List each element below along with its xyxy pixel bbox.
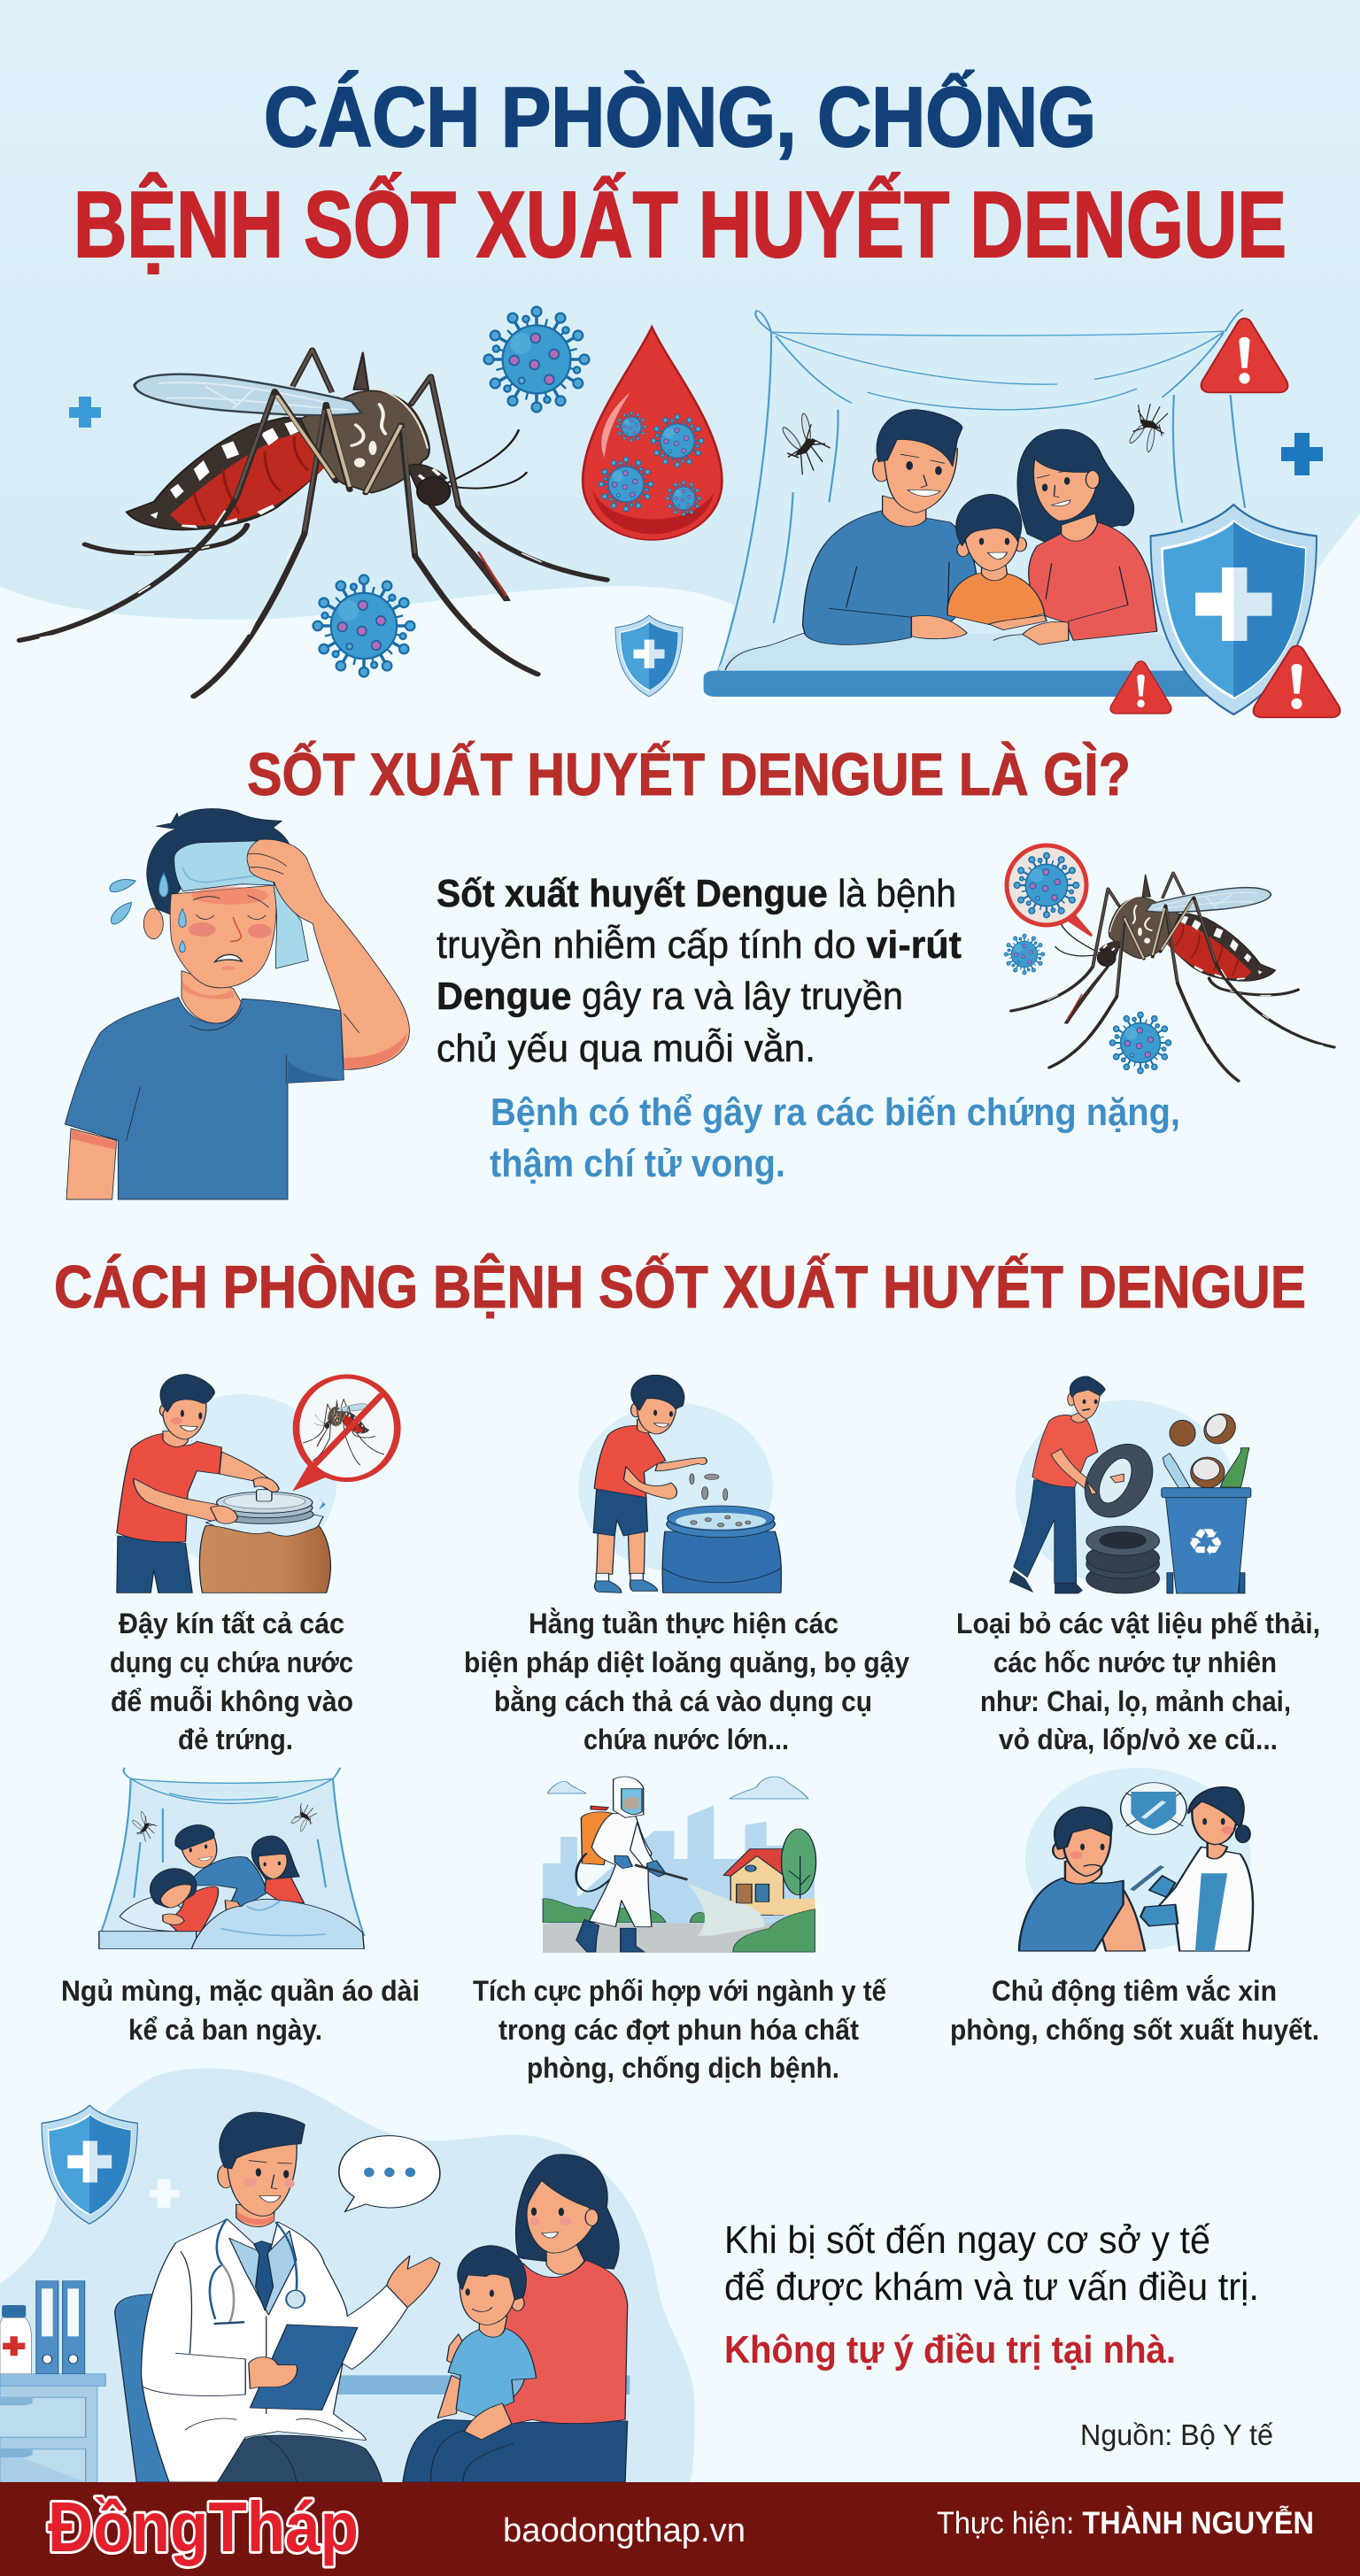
- caption: cover containers: đẻ trứng.: [178, 1724, 293, 1755]
- illustration: mosquito: [19, 350, 607, 697]
- bench: [324, 2375, 630, 2395]
- caption: remove waste: [956, 1608, 1320, 1755]
- icon: no mosquito sign: [294, 1377, 398, 1490]
- text: seek medical care: Không tự ý điều trị tại nhà.: [724, 2328, 1176, 2372]
- text: dengue warning: [490, 1091, 1180, 1185]
- child: [947, 494, 1047, 630]
- blanket: [191, 1899, 364, 1949]
- mother: [167, 1886, 218, 1932]
- illustration: sick man with towel: [65, 809, 409, 1199]
- caption: cooperate spraying: trong các đợt phun hóa chất: [498, 2014, 859, 2046]
- caption: remove waste: Loại bỏ các vật liệu phế thải,: [956, 1608, 1320, 1639]
- bed frame: [704, 671, 1250, 697]
- binders: [36, 2281, 85, 2374]
- caption: sleep under net: Ngủ mùng, mặc quần áo dài: [61, 1975, 420, 2007]
- caption: remove waste: các hốc nước tự nhiên: [993, 1647, 1277, 1678]
- caption: weekly larvae control: Hằng tuần thực hiện các: [529, 1608, 838, 1639]
- illustration: small mosquito with virus: [1004, 845, 1334, 1081]
- icon: large shield: [1151, 505, 1317, 714]
- panel: cover water containers: [117, 1375, 398, 1593]
- caption: weekly larvae control: bằng cách thả cá vào dụng cụ: [494, 1685, 872, 1717]
- icon: plus left: [69, 397, 101, 428]
- caption: cover containers: để muỗi không vào: [111, 1685, 353, 1717]
- text: dengue definition: chủ yếu qua muỗi vằn.: [437, 1027, 815, 1070]
- spray cloud: [687, 1883, 764, 1936]
- mother: [1017, 429, 1157, 644]
- caption: remove waste: như: Chai, lọ, mảnh chai,: [980, 1685, 1291, 1717]
- panel: chemical spraying: [543, 1777, 816, 1953]
- icon: plus white: [150, 2179, 179, 2208]
- caption: cooperate spraying: phòng, chống dịch bệnh.: [527, 2052, 839, 2084]
- caption: sleep under net: kể cả ban ngày.: [128, 2014, 322, 2046]
- caption: cover containers: dụng cụ chứa nước: [110, 1647, 353, 1678]
- caption: cover containers: Đậy kín tất cả các: [119, 1608, 344, 1639]
- caption: vaccinate: [950, 1975, 1319, 2046]
- daughter: [265, 1875, 305, 1903]
- captions row 1: [110, 1608, 1320, 1755]
- caption: cooperate spraying: [473, 1975, 886, 2084]
- mosquito net: [718, 310, 1279, 673]
- caption: weekly larvae control: chứa nước lớn...: [583, 1724, 789, 1755]
- icon: warning bottom small: [1110, 661, 1171, 713]
- text: dengue definition: [437, 872, 962, 1070]
- title line 1: CÁCH PHÒNG, CHỐNG: [264, 69, 1096, 165]
- caption: cooperate spraying: Tích cực phối hợp với ngành y tế: [473, 1975, 886, 2007]
- items: [1170, 1420, 1195, 1446]
- footer website: baodongthap.vn: [503, 2512, 746, 2549]
- panel: remove waste: [1009, 1377, 1251, 1593]
- text: source: Nguồn: Bộ Y tế: [1080, 2418, 1273, 2451]
- worker: [581, 1812, 618, 1865]
- icon: virus bottom: [313, 575, 414, 676]
- text: dengue definition: truyền nhiễm cấp tính do vi-rút: [437, 923, 962, 967]
- caption: weekly larvae control: biện pháp diệt loăng quăng, bọ gậy: [464, 1647, 909, 1678]
- callout: virus bubble: [1007, 845, 1092, 936]
- icon: small shield: [615, 615, 683, 697]
- captions row 2: [61, 1975, 1319, 2084]
- text: seek medical care: để được khám và tư vấn điều trị.: [724, 2265, 1259, 2309]
- icon: virus top: [484, 307, 589, 412]
- text: seek medical care: Khi bị sốt đến ngay cơ sở y tế: [724, 2218, 1210, 2262]
- icon: vaccine badge: [1121, 1783, 1186, 1834]
- icon: warning bottom large: [1254, 646, 1340, 717]
- nurse: [1154, 1847, 1253, 1951]
- icon: doctor shield: [42, 2105, 137, 2224]
- tyre stack: [1086, 1564, 1159, 1593]
- caption: remove waste: vỏ dừa, lốp/vỏ xe cũ...: [999, 1724, 1278, 1755]
- panel: fish in water barrel: [578, 1375, 781, 1593]
- text: dengue definition: Sốt xuất huyết Dengue là bệnh: [437, 872, 956, 915]
- caption: weekly larvae control: [464, 1608, 909, 1755]
- title: [73, 69, 1287, 277]
- footer band: [0, 2482, 1360, 2576]
- footer credit: Thực hiện: THÀNH NGUYỄN: [937, 2505, 1314, 2541]
- recycling bin: [1167, 1573, 1245, 1593]
- house: [730, 1853, 784, 1915]
- heading: what is dengue: SỐT XUẤT HUYẾT DENGUE LÀ GÌ?: [247, 740, 1131, 808]
- panel: vaccination: [1019, 1768, 1253, 1951]
- text: dengue warning: thậm chí tử vong.: [490, 1142, 785, 1185]
- panel: remove waste: ♻: [1186, 1523, 1225, 1563]
- patient: [1088, 1883, 1145, 1951]
- caption: vaccinate: phòng, chống sốt xuất huyết.: [950, 2014, 1319, 2046]
- bottle: [0, 2305, 32, 2374]
- net mosquitoes: [775, 397, 1172, 480]
- tyre held: [1072, 1434, 1166, 1527]
- footer logo: ĐồngTháp: [48, 2487, 359, 2566]
- text: seek medical care: [724, 2218, 1259, 2372]
- speech bubble: [339, 2136, 440, 2211]
- caption: sleep under net: [61, 1975, 420, 2046]
- mother and child: [403, 2155, 628, 2482]
- icon: plus right: [1281, 433, 1323, 475]
- illustration: family under mosquito net: [704, 310, 1279, 697]
- text: dengue warning: Bệnh có thể gây ra các biến chứng nặng,: [491, 1091, 1180, 1134]
- icon: blood drop with viruses: [583, 327, 722, 540]
- caption: vaccinate: Chủ động tiêm vắc xin: [992, 1975, 1277, 2007]
- father sleeping: [194, 1857, 267, 1908]
- chair: [115, 2294, 169, 2482]
- cabinet: [0, 2374, 105, 2482]
- doctor: [142, 2112, 440, 2482]
- caption: cover containers: [110, 1608, 353, 1755]
- illustration: doctor consultation: [0, 2068, 694, 2482]
- text: dengue definition: Dengue gây ra và lây truyền: [437, 975, 903, 1018]
- icon: warning top: [1202, 319, 1287, 392]
- father: [803, 410, 977, 644]
- panel: sleeping under net: [99, 1768, 364, 1949]
